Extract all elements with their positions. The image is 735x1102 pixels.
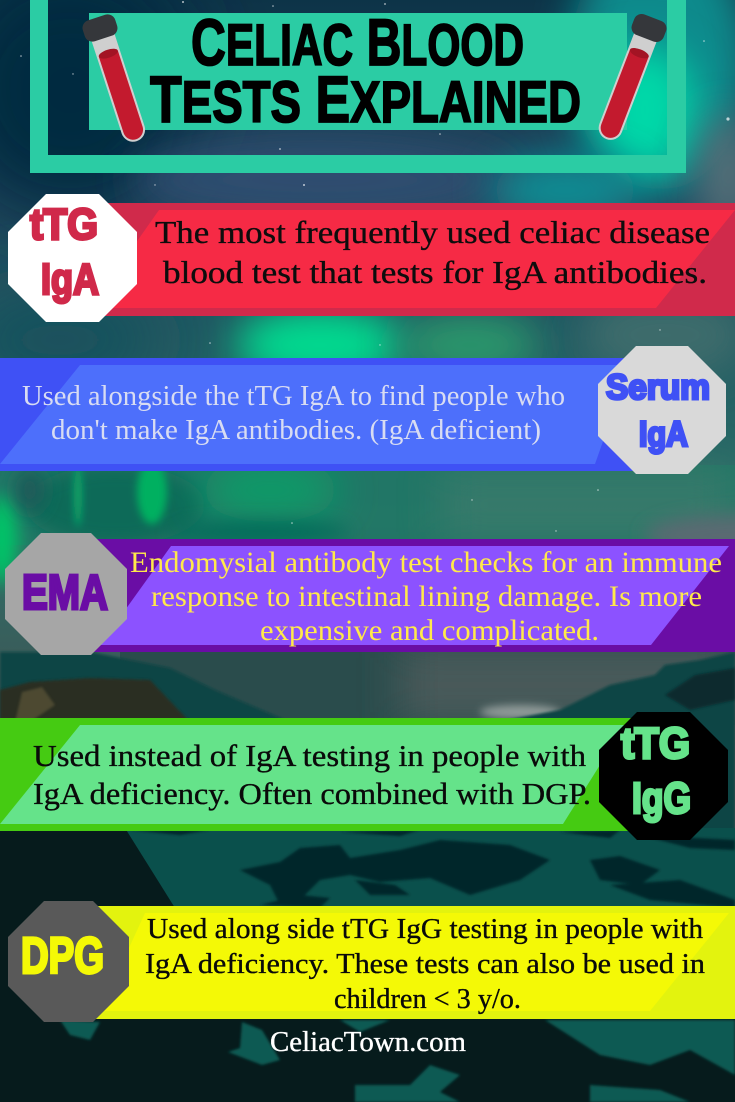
header frame <box>30 0 686 173</box>
badge: tTG IgA <box>8 194 137 322</box>
panel: EMA <box>5 533 735 655</box>
description: tTG IgG: Used instead of IgA testing in people with <box>33 738 587 773</box>
lower teal snow patches <box>60 1020 735 1102</box>
panel: tTG IgA <box>8 194 735 322</box>
footer website credit: CeliacTown.com <box>270 1027 466 1058</box>
description: Serum IgA: don't make IgA antibodies. (IgA deficient) <box>51 414 541 446</box>
badge: tTG IgG <box>599 712 728 840</box>
aurora streaks above the purple panel <box>0 458 735 585</box>
badge: tTG IgA: IgA <box>41 255 99 304</box>
badge: Serum IgA: IgA <box>639 415 688 454</box>
icon: left blood test tube <box>80 12 153 146</box>
snowy slope <box>0 828 735 1102</box>
panel: tTG IgG <box>0 712 728 840</box>
badge: EMA <box>5 533 127 655</box>
title: TESTS EXPLAINED <box>150 62 581 136</box>
description: tTG IgA <box>155 214 710 290</box>
description: DPG: children < 3 y/o. <box>334 984 521 1015</box>
description: EMA: response to intestinal lining damage. Is more <box>151 581 702 613</box>
description: Serum IgA <box>22 380 565 446</box>
badge: tTG IgG: tTG <box>621 719 690 768</box>
panel: Serum IgA <box>0 346 726 474</box>
badge: EMA: EMA <box>22 566 108 620</box>
description: tTG IgA: The most frequently used celiac disease <box>155 214 710 250</box>
description: DPG: Used along side tTG IgG testing in people with <box>147 914 703 945</box>
badge: tTG IgA: tTG <box>30 200 98 249</box>
badge: DPG <box>8 901 129 1022</box>
badge: Serum IgA <box>598 346 726 474</box>
description: tTG IgA: blood test that tests for IgA antibodies. <box>163 254 707 290</box>
description: tTG IgG <box>33 738 591 811</box>
description: DPG: IgA deficiency. These tests can also be used in <box>145 949 705 980</box>
description: EMA: Endomysial antibody test checks for an immune <box>130 547 722 579</box>
badge: DPG: DPG <box>21 927 104 984</box>
title <box>150 5 581 136</box>
description: tTG IgG: IgA deficiency. Often combined with DGP. <box>33 776 591 811</box>
description: DPG <box>145 914 705 1015</box>
stars are purely decorative dots <box>20 1 730 532</box>
badge: tTG IgG: IgG <box>632 774 691 823</box>
badge: Serum IgA: Serum <box>606 368 710 407</box>
title: CELIAC BLOOD <box>191 5 524 79</box>
description: EMA: expensive and complicated. <box>260 615 599 647</box>
icon: right blood test tube <box>590 12 669 145</box>
description: EMA <box>130 547 722 647</box>
title panel <box>89 13 627 130</box>
description: Serum IgA: Used alongside the tTG IgA to find people who <box>22 380 565 412</box>
panel: DPG <box>8 901 735 1022</box>
sky glow and mountains <box>0 645 735 845</box>
